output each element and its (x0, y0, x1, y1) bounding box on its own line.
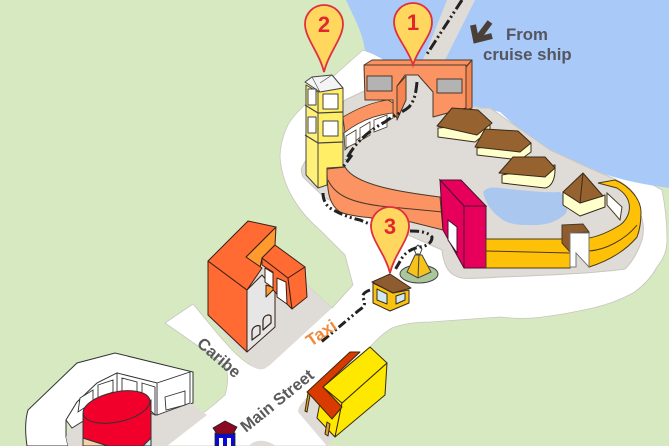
lot under white building (66, 403, 207, 446)
white building (66, 372, 190, 428)
hut 1 (437, 108, 492, 142)
lake (483, 187, 567, 225)
building: red tank (80, 385, 153, 446)
building: yellow tower (305, 75, 343, 188)
walking route: gate to tower (346, 82, 417, 160)
gray lot behind orange building (208, 250, 332, 369)
building: magenta block (440, 180, 486, 268)
building: orange arcade (343, 100, 393, 150)
caption: From cruise ship: From (506, 25, 548, 44)
building: blue kiosk (213, 421, 237, 446)
pin 3: 3 (384, 214, 396, 239)
caption: From cruise ship: cruise ship (483, 45, 572, 64)
building: red-orange corner block (208, 221, 307, 352)
pin 2 (305, 5, 343, 72)
pin 1: 1 (407, 10, 419, 35)
walking route: taxi line (320, 290, 370, 343)
white roads (150, 50, 667, 446)
building: yellow wall (486, 180, 641, 268)
taxi stand (372, 274, 411, 311)
arrow: from cruise ship (473, 22, 492, 40)
pin 1 (394, 3, 432, 65)
label: Taxi: Taxi (302, 316, 340, 350)
gray lot under yellow building (298, 385, 340, 446)
walking route: pier (427, 0, 462, 54)
label: Main Street: Main Street (237, 366, 318, 436)
building: bright yellow store (305, 347, 387, 437)
walking route: tower to taxi stand (323, 155, 432, 270)
small gray lot at bottom edge (249, 441, 276, 446)
building: curved orange wall (327, 167, 443, 230)
water (346, 0, 669, 188)
monument (400, 245, 438, 283)
hut 2 (475, 129, 531, 160)
pier (423, 0, 475, 60)
plaza ground (301, 65, 643, 278)
pin 2: 2 (318, 12, 330, 37)
label: Caribe: Caribe (193, 334, 244, 382)
pin 3 (371, 207, 409, 273)
building: orange gate (364, 60, 472, 120)
white courtyard plaza (26, 353, 193, 446)
hut 4 (563, 173, 605, 216)
building: brown gatehouse (562, 224, 589, 267)
hut 3 (499, 157, 555, 188)
